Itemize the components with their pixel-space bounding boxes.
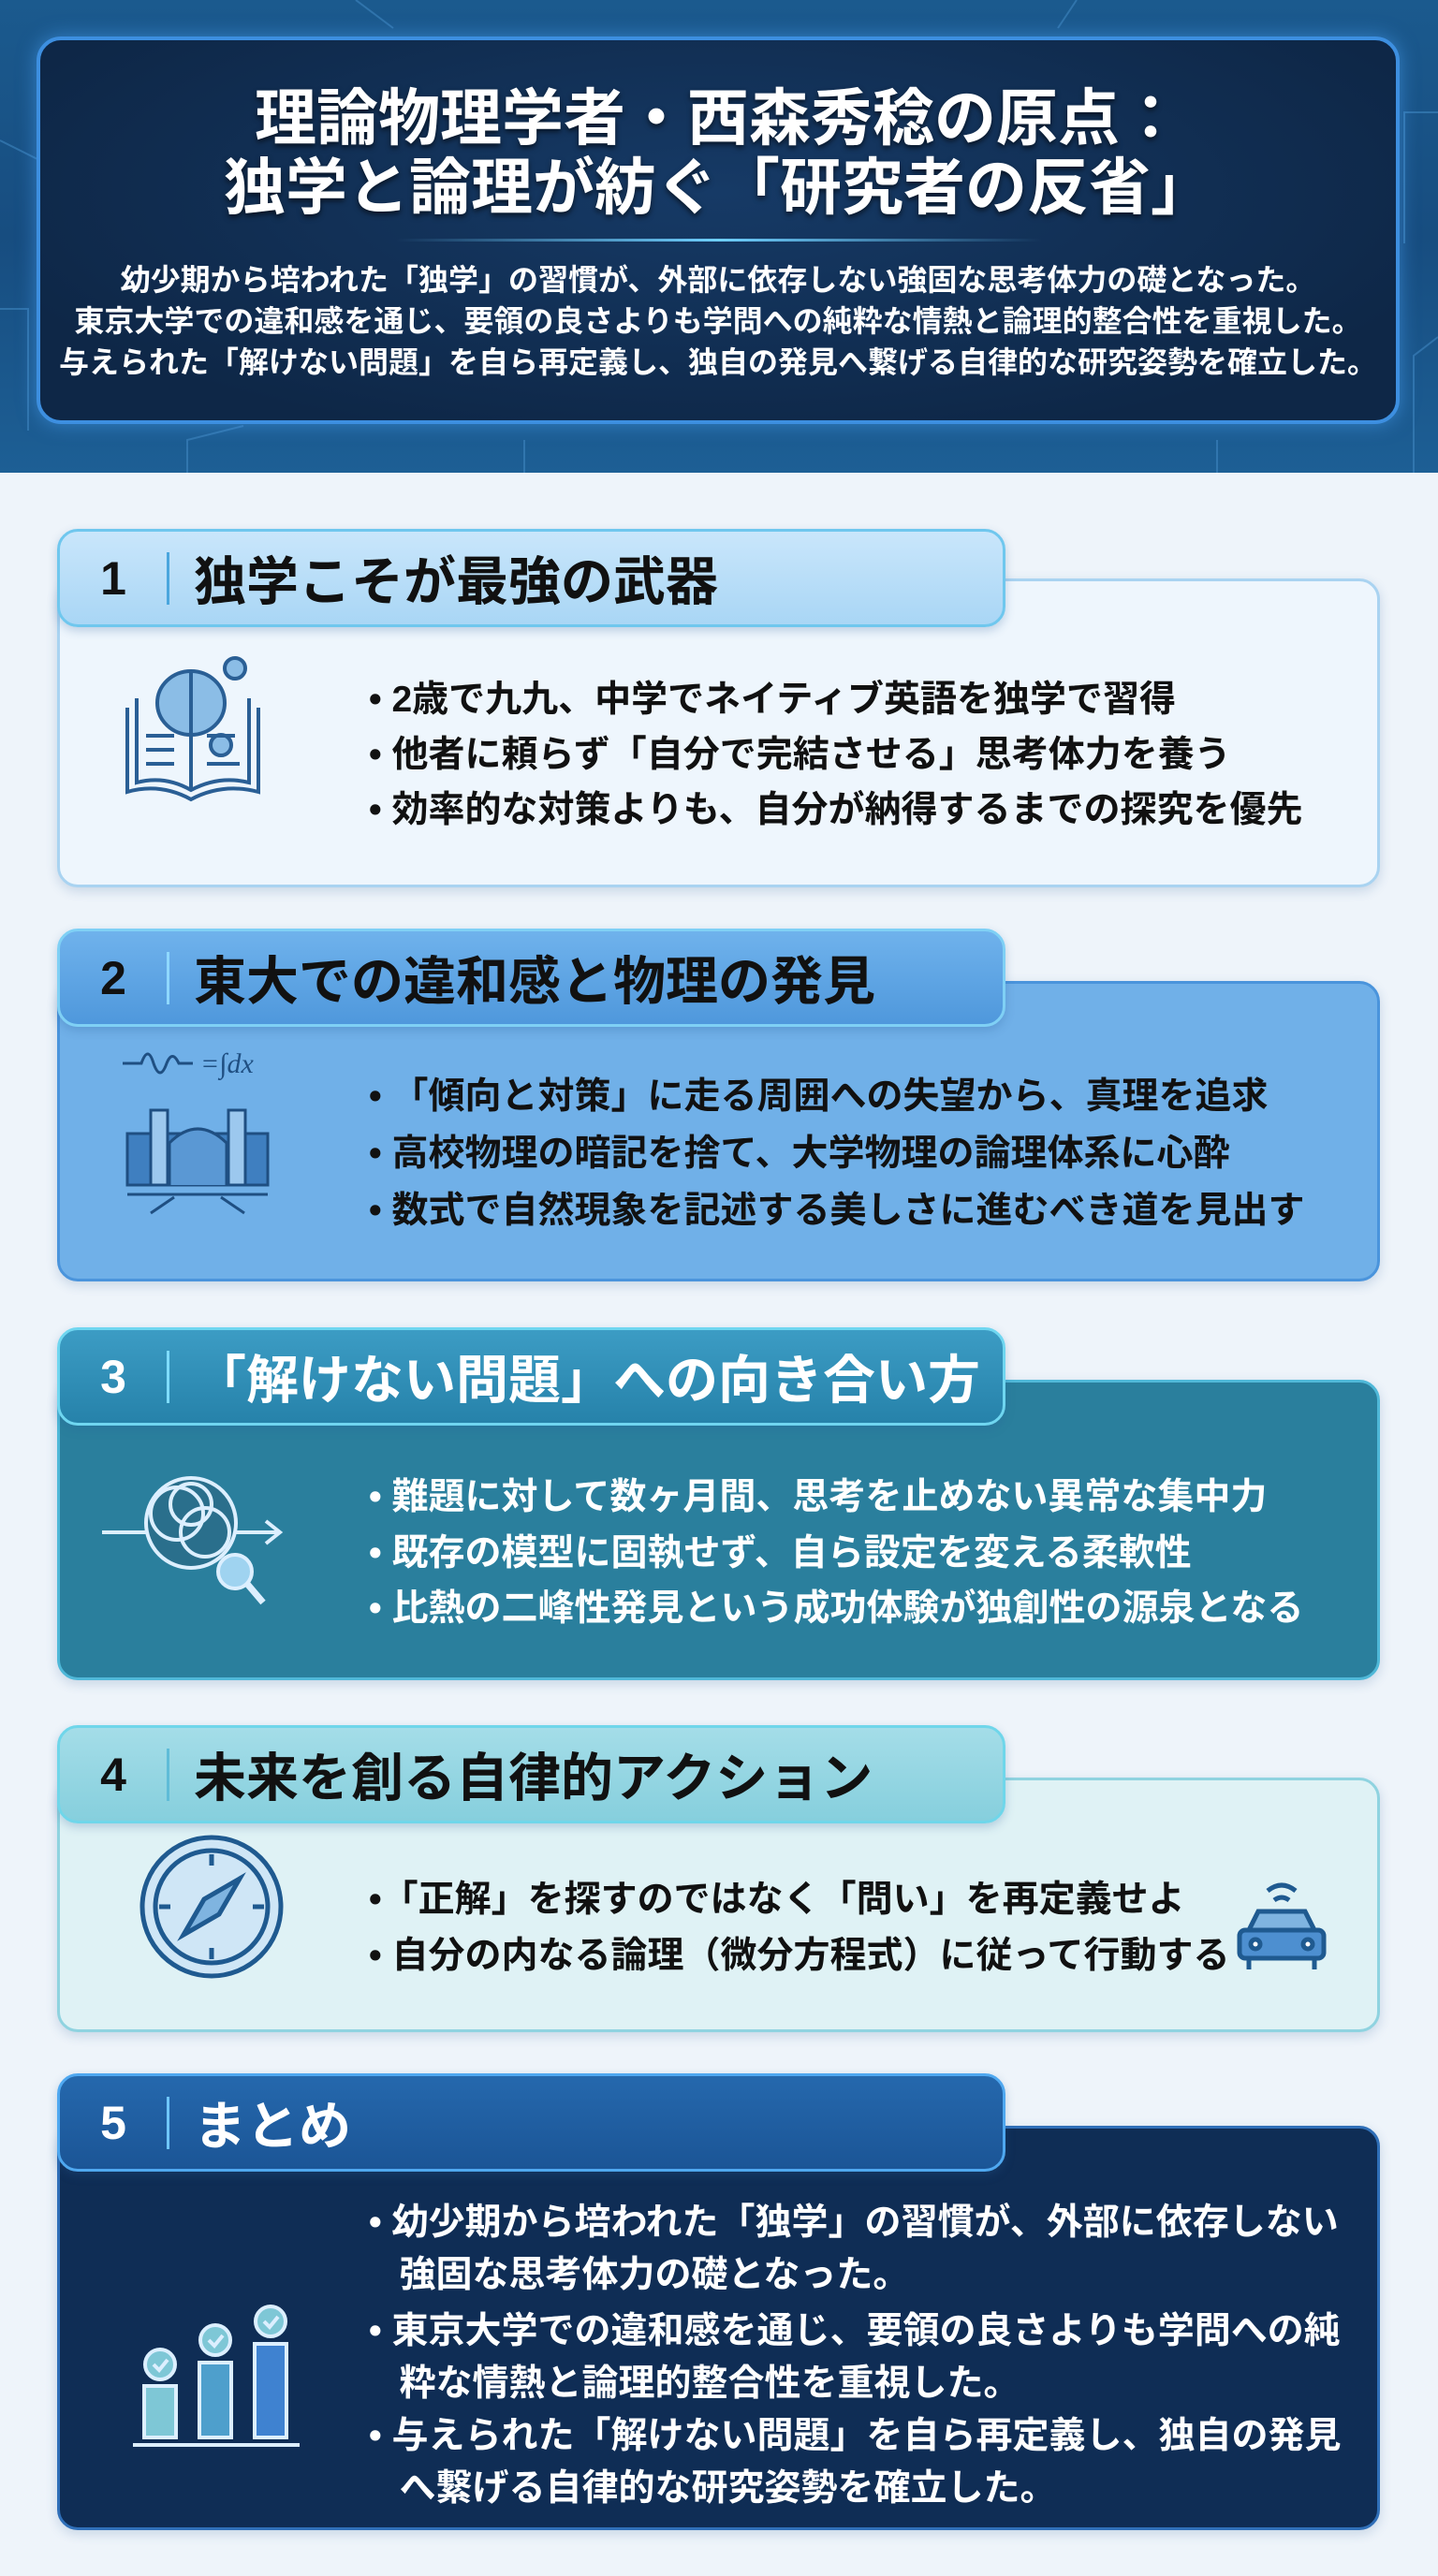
section 4 tab: 未来を創る自律的アクション — [194, 1749, 873, 1808]
section 3 tab — [57, 1327, 1005, 1426]
section 5 tab: 5 — [100, 2097, 126, 2149]
icon: connected car — [1238, 1882, 1326, 1969]
section 5 body: へ繋げる自律的な研究姿勢を確立した。 — [399, 2468, 1057, 2509]
section 3 body — [57, 1380, 1380, 1680]
section 1 body — [57, 578, 1380, 887]
section 2 body: • 高校物理の暗記を捨て、大学物理の論理体系に心酔 — [369, 1134, 1230, 1174]
section 5 tab: まとめ — [194, 2097, 351, 2156]
section 3 body: • 既存の模型に固執せず、自ら設定を変える柔軟性 — [369, 1533, 1192, 1573]
section 4 body — [57, 1778, 1380, 2032]
section 3 body: • 比熱の二峰性発見という成功体験が独創性の源泉となる — [369, 1588, 1303, 1629]
section 3 tab: 「解けない問題」への向き合い方 — [194, 1351, 980, 1410]
subtitle text: 与えられた「解けない問題」を自ら再定義し、独自の発見へ繋げる自律的な研究姿勢を確立した。 — [59, 345, 1377, 379]
section 1 tab — [57, 529, 1005, 627]
bullets: • 2歳で九九、中学でネイティブ英語を独学で習得 — [369, 680, 1176, 720]
icon: formula and university gate — [123, 1048, 270, 1215]
section 2 body: • 数式で自然現象を記述する美しさに進むべき道を見出す — [369, 1191, 1305, 1231]
subtitle text: 東京大学での違和感を通じ、要領の良さよりも学問への純粋な情熱と論理的整合性を重視した。 — [74, 304, 1362, 338]
header background — [0, 0, 1438, 473]
section 5 tab — [57, 2073, 1005, 2172]
section 3 tab: 3 — [100, 1350, 126, 1402]
section 1 body: • 効率的な対策よりも、自分が納得するまでの探究を優先 — [369, 790, 1303, 830]
section 4 body: • 自分の内なる論理（微分方程式）に従って行動する — [369, 1936, 1230, 1976]
section 5 body: • 東京大学での違和感を通じ、要領の良さよりも学問への純 — [369, 2311, 1341, 2351]
bullets: • 幼少期から培われた「独学」の習慣が、外部に依存しない — [369, 2203, 1339, 2243]
section 2 tab: 2 — [100, 951, 126, 1003]
title — [224, 83, 1212, 222]
section 4 tab: 4 — [100, 1749, 126, 1801]
divider glow — [396, 239, 1042, 242]
bullets: 強固な思考体力の礎となった。 — [399, 2255, 909, 2295]
section 1 body: • 他者に頼らず「自分で完結させる」思考体力を養う — [369, 735, 1231, 775]
section 5 body: • 与えられた「解けない問題」を自ら再定義し、独自の発見 — [369, 2416, 1341, 2456]
icon: book and brain — [125, 656, 260, 801]
section 5 body — [57, 2126, 1380, 2530]
panel: section 4 — [51, 1724, 1385, 2041]
section 4 tab — [57, 1725, 1005, 1823]
section 1 tab: 独学こそが最強の武器 — [194, 552, 718, 611]
bullets — [369, 2202, 1339, 2295]
icon: tangled knot with magnifier — [102, 1476, 283, 1604]
panel: section 5 summary — [51, 2072, 1385, 2539]
icon: formula and university gate: =∫dx — [200, 1048, 254, 1081]
bullets: •「正解」を探すのではなく「問い」を再定義せよ — [369, 1880, 1185, 1920]
subtitle text: 幼少期から培われた「独学」の習慣が、外部に依存しない強固な思考体力の礎となった。 — [121, 263, 1315, 297]
section 1 tab: 1 — [100, 552, 126, 605]
title: 理論物理学者・西森秀稔の原点： — [255, 83, 1181, 153]
subtitle text — [59, 263, 1377, 379]
header panel — [37, 37, 1400, 424]
section 2 tab — [57, 929, 1005, 1027]
section 2 tab: 東大での違和感と物理の発見 — [194, 952, 875, 1011]
title: 独学と論理が紡ぐ「研究者の反省」 — [224, 153, 1212, 222]
panel: section 3 — [51, 1326, 1385, 1689]
bullets: • 難題に対して数ヶ月間、思考を止めない異常な集中力 — [369, 1477, 1267, 1517]
section 5 body: 粋な情熱と論理的整合性を重視した。 — [399, 2364, 1020, 2404]
panel: section 2 — [51, 928, 1385, 1290]
panel: section 1 — [51, 528, 1385, 896]
icon: compass — [140, 1835, 283, 1979]
bullets: • 「傾向と対策」に走る周囲への失望から、真理を追求 — [369, 1076, 1268, 1117]
icon: bar chart with checks — [133, 2305, 300, 2447]
section 2 body — [57, 981, 1380, 1281]
